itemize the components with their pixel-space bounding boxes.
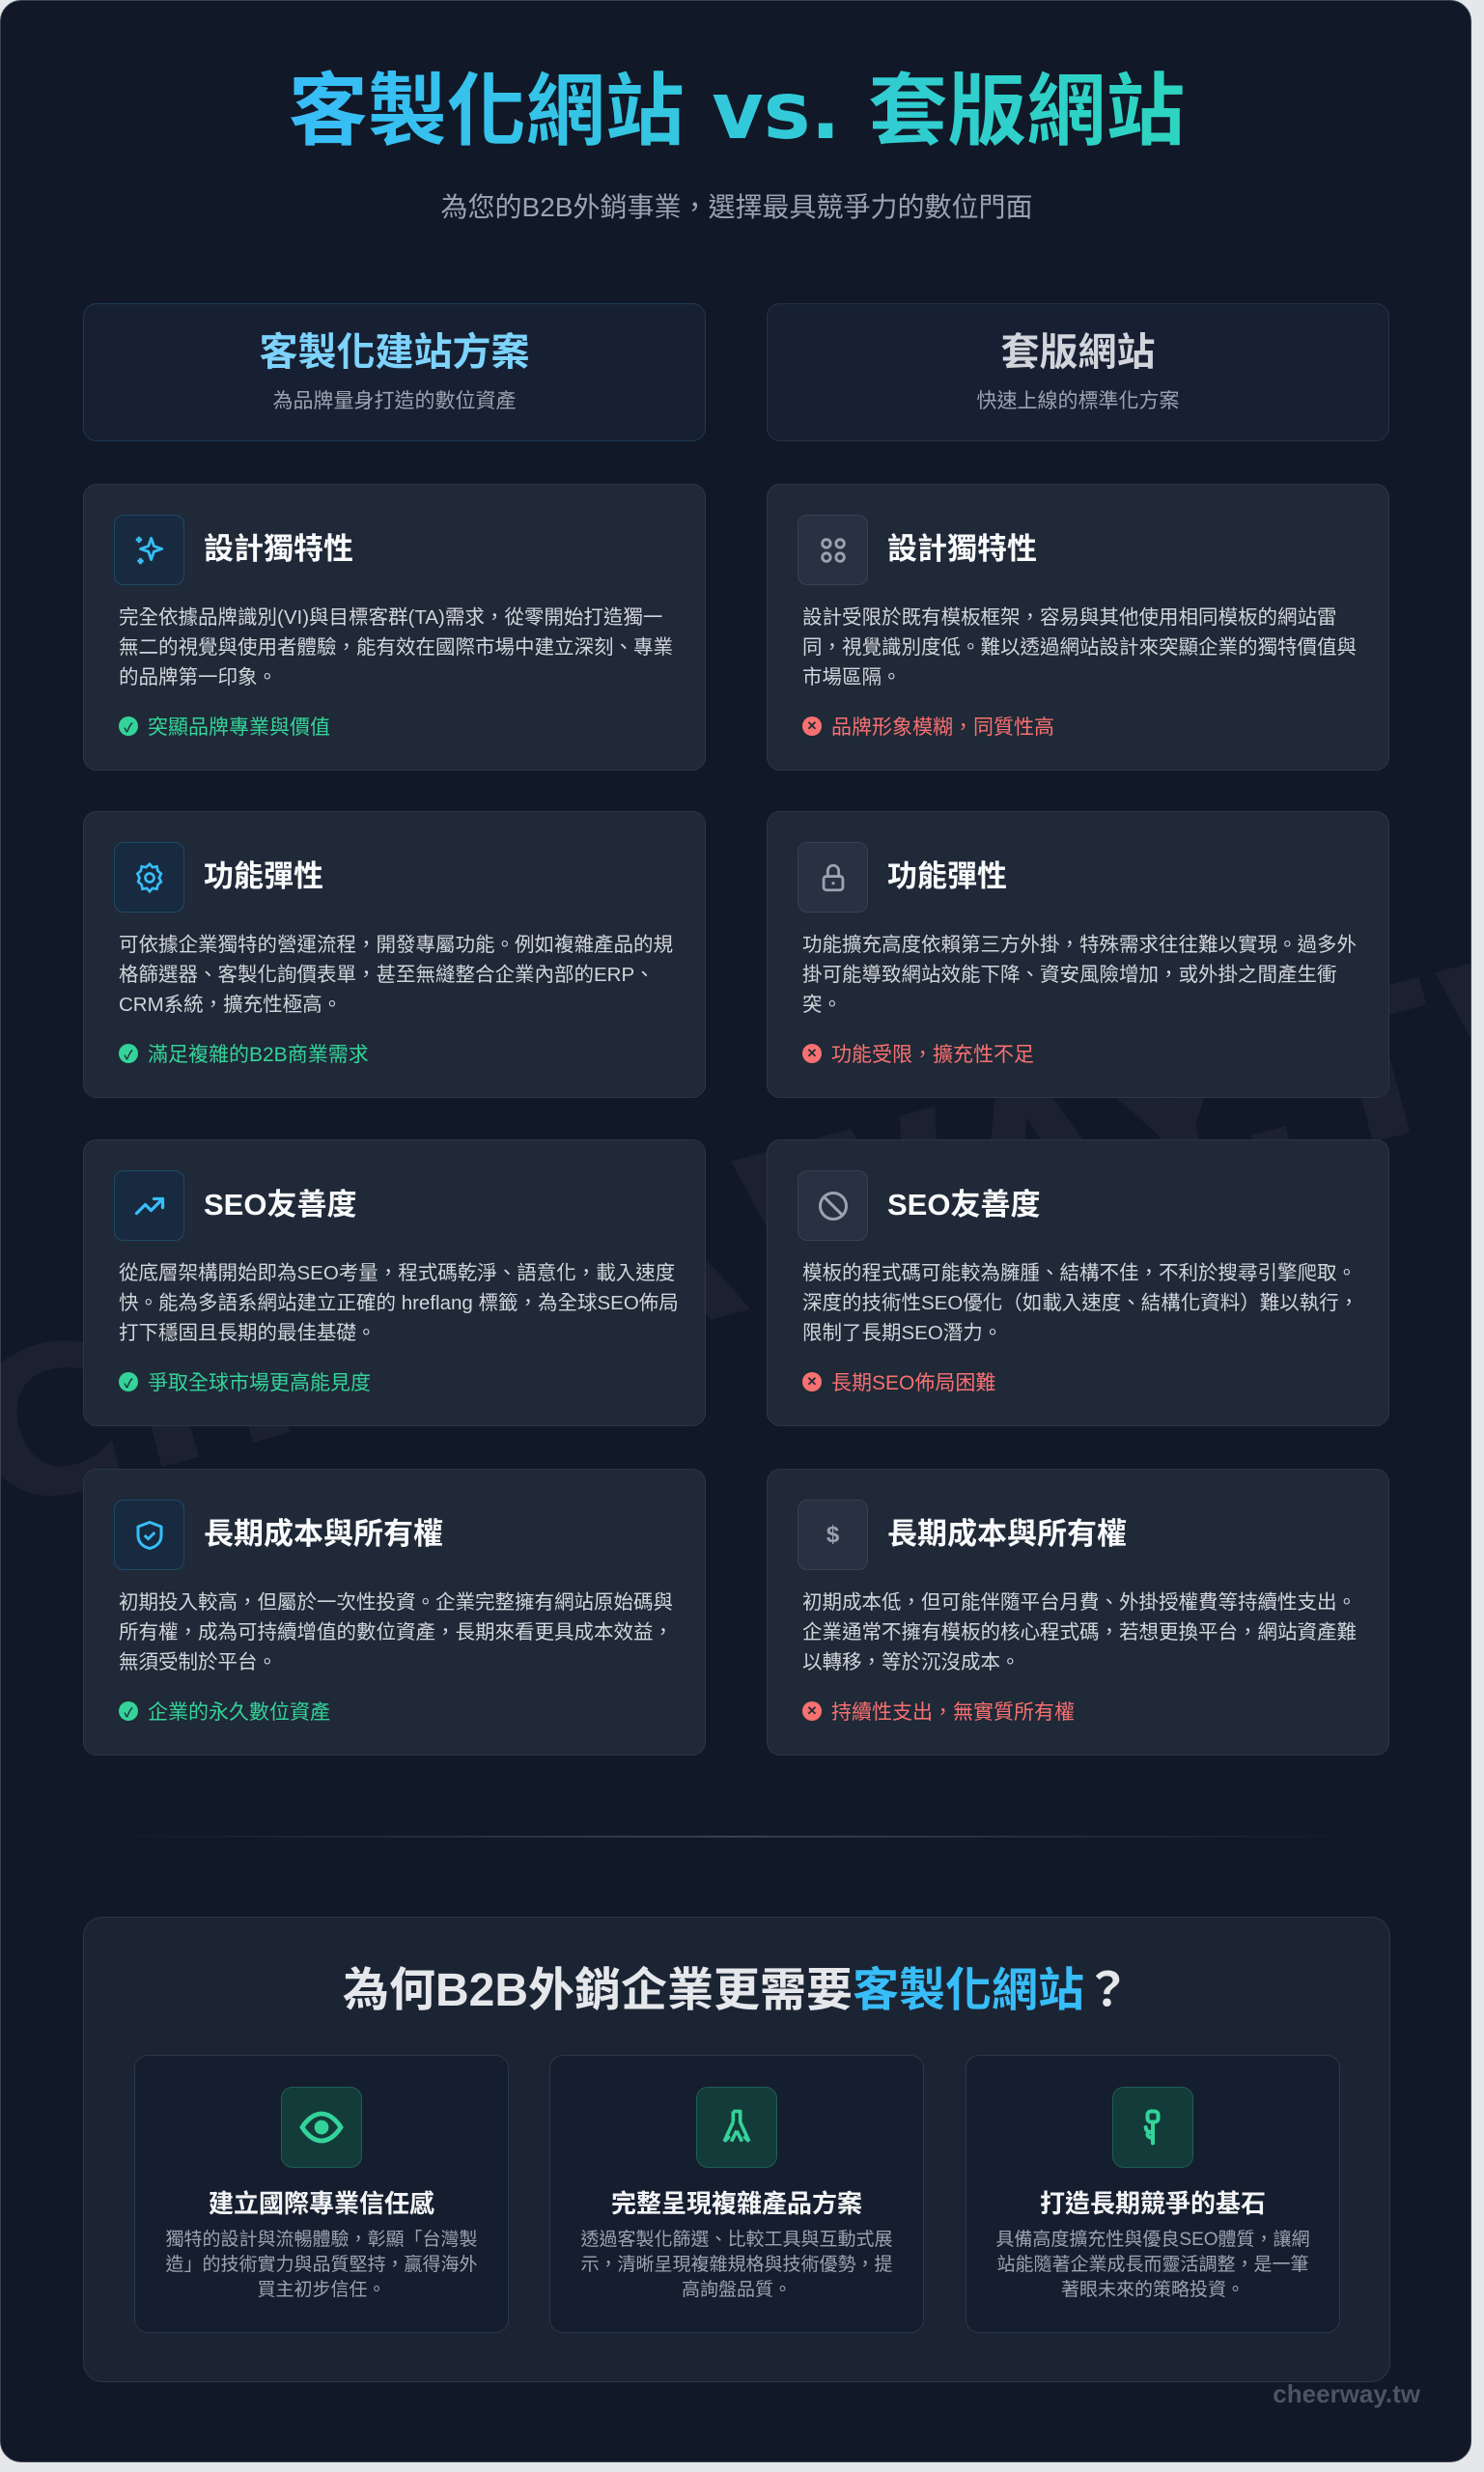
footer brand: cheerway.tw: [1273, 2379, 1420, 2408]
card: products: 完整呈現複雜產品方案: [611, 2189, 862, 2218]
icon: gear: [114, 842, 184, 913]
card: template cost: [767, 1469, 1389, 1756]
card: custom function: 功能彈性: [204, 859, 323, 893]
card: custom design: 設計獨特性: [204, 532, 353, 566]
icon: sparkles: [114, 515, 184, 585]
card: custom SEO: 從底層架構開始即為SEO考量，程式碼乾淨、語意化，載入速度快。能為多語系網站建立正確的 hreflang 標籤，為全球SEO佈局打下穩固且長期的最佳基礎。: [119, 1262, 679, 1344]
card: template function: [767, 811, 1389, 1098]
card: custom SEO: SEO友善度: [204, 1188, 356, 1222]
card: custom design: 完全依據品牌識別(VI)與目標客群(TA)需求，從零開始打造獨一無二的視覺與使用者體驗，能有效在國際市場中建立深刻、專業的品牌第一印象。: [119, 606, 673, 688]
title: 客製化網站 vs. 套版網站: [289, 66, 1185, 157]
subtitle: 為您的B2B外銷事業，選擇最具競爭力的數位門面: [441, 192, 1032, 222]
card: template design: 設計獨特性: [887, 532, 1037, 566]
header: custom: 客製化建站方案: [259, 331, 529, 374]
card: products: [549, 2055, 924, 2333]
card: custom SEO: [83, 1139, 706, 1426]
icon: trend: [114, 1170, 184, 1241]
tag: ✓: [124, 720, 133, 734]
card: custom function: 可依據企業獨特的營運流程，開發專屬功能。例如複雜產品的規格篩選器、客製化詢價表單，甚至無縫整合企業內部的ERP、CRM系統，擴充性極高。: [119, 934, 673, 1016]
heading: 為何B2B外銷企業更需要客製化網站？: [343, 1965, 1131, 2016]
header: custom: [83, 303, 706, 441]
panel: why B2B: [83, 1917, 1390, 2382]
card: template cost: 初期成本低，但可能伴隨平台月費、外掛授權費等持續性支出。企業通常不擁有模板的核心程式碼，若想更換平台，網站資產難以轉移，等於沉沒成本。: [802, 1591, 1357, 1673]
card: foundation: 具備高度擴充性與優良SEO體質，讓網站能隨著企業成長而靈活調整，是一筆著眼未來的策略投資。: [995, 2230, 1310, 2300]
card: template design: 設計受限於既有模板框架，容易與其他使用相同模板的網站雷同，視覺識別度低。難以透過網站設計來突顯企業的獨特價值與市場區隔。: [802, 606, 1357, 688]
card: template function: 功能擴充高度依賴第三方外掛，特殊需求往往難以實現。過多外掛可能導致網站效能下降、資安風險增加，或外掛之間產生衝突。: [802, 934, 1357, 1016]
card: trust: [134, 2055, 509, 2333]
icon: eye: [281, 2087, 362, 2168]
card: template cost: 長期成本與所有權: [887, 1517, 1127, 1551]
tag: ✕: [807, 1703, 817, 1718]
card: custom cost: 長期成本與所有權: [204, 1517, 443, 1551]
card: trust: 獨特的設計與流暢體驗，彰顯「台灣製造」的技術實力與品質堅持，贏得海外買主初步信任。: [165, 2230, 477, 2300]
card: custom function: [83, 811, 706, 1098]
header: custom: 為品牌量身打造的數位資產: [272, 390, 516, 412]
tag: 滿足複雜的B2B商業需求: [148, 1044, 369, 1066]
tag: 突顯品牌專業與價值: [148, 716, 330, 739]
tag: 功能受限，擴充性不足: [831, 1044, 1034, 1066]
header: template: 套版網站: [1000, 331, 1155, 374]
tag: ✕: [807, 1046, 817, 1060]
icon: pin: [1112, 2087, 1193, 2168]
tag: ✕: [807, 1374, 817, 1389]
card: foundation: [966, 2055, 1340, 2333]
card: custom cost: [83, 1469, 706, 1756]
icon: flask: [696, 2087, 777, 2168]
icon: shield: [114, 1500, 184, 1570]
icon: dollar: [798, 1500, 868, 1570]
card: custom design: [83, 484, 706, 771]
tag: ✓: [124, 1705, 133, 1719]
card: template SEO: SEO友善度: [887, 1188, 1040, 1222]
tag: 企業的永久數位資產: [148, 1701, 330, 1724]
header: template: [767, 303, 1389, 441]
card: template SEO: [767, 1139, 1389, 1426]
card: template SEO: 模板的程式碼可能較為臃腫、結構不佳，不利於搜尋引擎爬取。深度的技術性SEO優化（如載入速度、結構化資料）難以執行，限制了長期SEO潛力。: [802, 1262, 1358, 1344]
tag: 持續性支出，無實質所有權: [831, 1701, 1075, 1724]
card: template function: 功能彈性: [887, 859, 1007, 893]
header: template: 快速上線的標準化方案: [977, 390, 1180, 412]
card: foundation: 打造長期競爭的基石: [1040, 2189, 1266, 2218]
tag: 長期SEO佈局困難: [831, 1372, 995, 1394]
card: products: 透過客製化篩選、比較工具與互動式展示，清晰呈現複雜規格與技術優勢，提高詢盤品質。: [580, 2230, 892, 2300]
card: custom cost: 初期投入較高，但屬於一次性投資。企業完整擁有網站原始碼與所有權，成為可持續增值的數位資產，長期來看更具成本效益，無須受制於平台。: [119, 1591, 673, 1673]
icon: lock: [798, 842, 868, 913]
tag: 爭取全球市場更高能見度: [148, 1372, 371, 1394]
tag: ✕: [807, 718, 817, 733]
card: template design: [767, 484, 1389, 771]
icon: ban: [798, 1170, 868, 1241]
tag: ✓: [124, 1047, 133, 1062]
tag: 品牌形象模糊，同質性高: [831, 716, 1054, 739]
card: trust: 建立國際專業信任感: [209, 2189, 434, 2218]
tag: ✓: [124, 1375, 133, 1390]
icon: grid: [798, 515, 868, 585]
icon: dollar: $: [826, 1522, 839, 1547]
